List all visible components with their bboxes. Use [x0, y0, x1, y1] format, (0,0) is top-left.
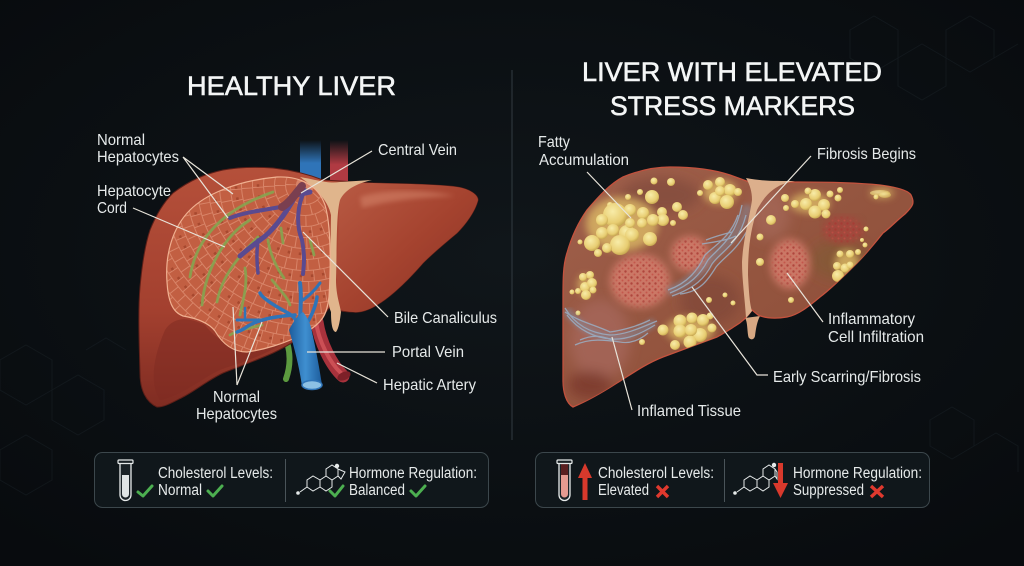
- panel: stressed status bar: [536, 452, 930, 508]
- text: hormone balanced: Hormone Regulation:: [349, 465, 477, 482]
- labels: healthy liver: Hepatic Artery: [383, 377, 476, 394]
- labels: stressed liver: Inflamed Tissue: [637, 403, 741, 420]
- text: hormone balanced: Balanced: [349, 482, 405, 499]
- labels: stressed liver: Cell Infiltration: [828, 329, 924, 346]
- labels: stressed liver: [538, 134, 924, 420]
- labels: stressed liver: Inflammatory: [828, 311, 915, 328]
- labels: healthy liver: Bile Canaliculus: [394, 310, 497, 327]
- right lobe: [336, 183, 478, 312]
- central vein tree: [230, 186, 310, 274]
- fibrosis strands: [668, 205, 748, 292]
- text: hormone balanced: [349, 465, 477, 499]
- text: cholesterol normal: Cholesterol Levels:: [158, 465, 273, 482]
- labels: stressed liver: Accumulation: [539, 152, 629, 169]
- title: liver with elevated stress markers: [582, 57, 882, 121]
- liver body: [139, 167, 478, 407]
- text: cholesterol normal: Normal: [158, 482, 202, 499]
- text: cholesterol normal: [158, 465, 273, 499]
- labels: healthy liver: Cord: [97, 200, 127, 217]
- icon: test tube elevated: [557, 460, 572, 500]
- panel: healthy liver illustration: [138, 141, 478, 408]
- icon: steroid molecule: [733, 463, 777, 495]
- panel: healthy status bar: [94, 452, 488, 508]
- labels: healthy liver: Normal: [97, 132, 145, 149]
- inflammatory patches: [606, 216, 864, 312]
- icon: cross: [657, 486, 668, 497]
- text: hormone suppressed: [793, 465, 922, 499]
- labels: healthy liver: Hepatocytes: [97, 149, 179, 166]
- icon: check: [208, 486, 222, 496]
- falciform ligament: [300, 177, 372, 332]
- icon: check: [330, 486, 343, 496]
- arrow: down: [773, 463, 788, 498]
- icon: test tube normal: [118, 460, 133, 500]
- labels: healthy liver: Hepatocyte: [97, 183, 171, 200]
- text: hormone suppressed: Suppressed: [793, 482, 864, 499]
- labels: healthy liver: Portal Vein: [392, 344, 464, 361]
- microscopic section: hepatocyte cut-away: [167, 178, 330, 352]
- icon: check: [138, 486, 152, 496]
- labels: stressed liver: Early Scarring/Fibrosis: [773, 369, 921, 386]
- falciform ligament: [742, 178, 795, 318]
- labels: healthy liver: Hepatocytes: [196, 406, 277, 423]
- callout lines: stressed liver: [587, 156, 823, 410]
- panel: stressed liver illustration: [560, 160, 920, 410]
- fat glow under clusters: [578, 180, 894, 343]
- arrow: up: [578, 463, 592, 500]
- text: cholesterol elevated: Elevated: [598, 482, 649, 499]
- text: cholesterol elevated: [598, 465, 714, 499]
- labels: healthy liver: [97, 132, 497, 423]
- labels: healthy liver: Central Vein: [378, 142, 457, 159]
- title: healthy liver: HEALTHY LIVER: [187, 71, 396, 101]
- hepatocyte cords: [190, 192, 314, 335]
- text: hormone suppressed: Hormone Regulation:: [793, 465, 922, 482]
- icon: steroid molecule: [296, 464, 345, 495]
- liver body: [563, 167, 913, 407]
- title: liver with elevated stress markers: LIVER WITH ELEVATED: [582, 57, 882, 87]
- vessels behind liver: [282, 140, 352, 383]
- icon: check: [411, 486, 425, 496]
- labels: stressed liver: Fatty: [538, 134, 570, 151]
- callout lines: healthy liver: [133, 151, 388, 385]
- icon: cross: [871, 486, 883, 497]
- mottling: [568, 177, 870, 399]
- drip of ligament: [745, 316, 760, 339]
- title: liver with elevated stress markers: STRESS MARKERS: [610, 91, 855, 121]
- fat droplets: [570, 177, 891, 350]
- portal vein tree: [237, 283, 320, 335]
- text: cholesterol elevated: Cholesterol Levels:: [598, 465, 714, 482]
- labels: stressed liver: Fibrosis Begins: [817, 146, 916, 163]
- labels: healthy liver: Normal: [213, 389, 260, 406]
